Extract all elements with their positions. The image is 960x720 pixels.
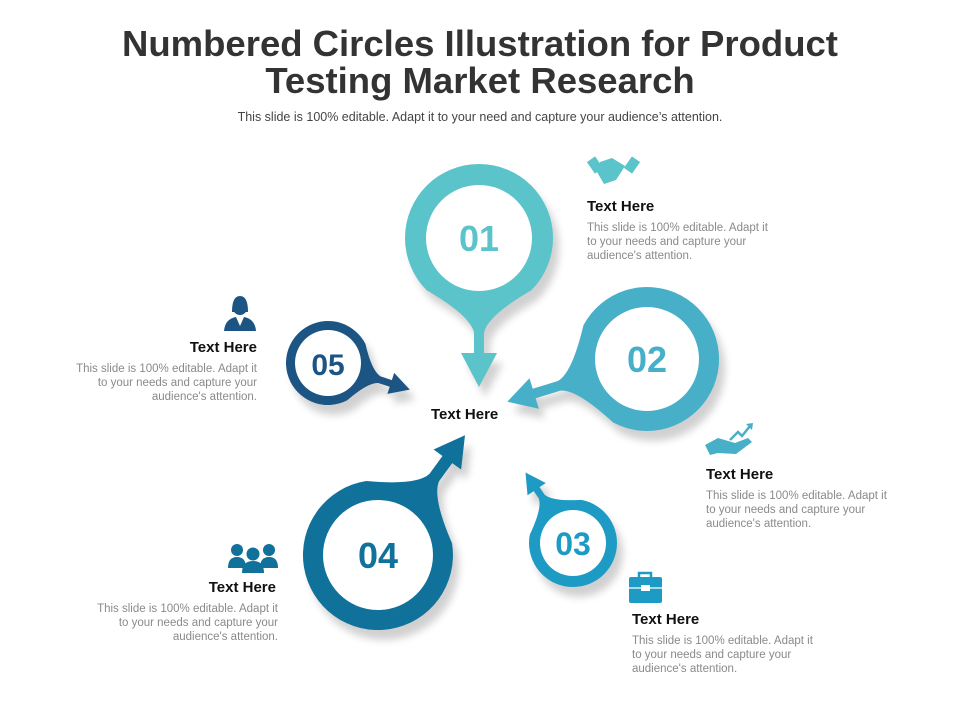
title [122,23,838,101]
text block 02: Text Here [706,466,773,483]
pin 03: 03 [555,526,591,562]
text block 05: This slide is 100% editable. Adapt it [76,363,257,375]
pin 04: 04 [358,535,398,576]
text block 04: Text Here [209,579,276,596]
text block 05: audience's attention. [152,391,257,403]
icon: handshake [587,156,640,184]
text block 03: to your needs and capture your [632,649,791,661]
text block 03: audience's attention. [632,663,737,675]
text block 03: Text Here [632,611,699,628]
text block 03: This slide is 100% editable. Adapt it [632,635,813,647]
pin 03 [489,448,640,614]
text block 01: This slide is 100% editable. Adapt it [587,222,768,234]
pin 02: 02 [627,339,667,380]
text block 02 [706,466,887,530]
text block 01 [587,198,768,262]
center label: Text Here [431,406,498,423]
icon: team [228,544,278,573]
text block 02: audience's attention. [706,518,811,530]
text block 04: audience's attention. [173,631,278,643]
text block 05 [76,339,257,403]
text block 05: Text Here [190,339,257,356]
icon: hand with growth arrow [705,423,753,455]
pin 05 [275,310,429,440]
icon: woman [224,296,256,331]
pin 01 [405,164,559,397]
text block 04: to your needs and capture your [119,617,278,629]
text block 04: This slide is 100% editable. Adapt it [97,603,278,615]
text block 03 [632,611,813,675]
text block 02: This slide is 100% editable. Adapt it [706,490,887,502]
text block 05: to your needs and capture your [98,377,257,389]
icon: briefcase [629,573,662,603]
pin 05: 05 [311,349,345,382]
text block 01: audience's attention. [587,250,692,262]
text block 01: to your needs and capture your [587,236,746,248]
subtitle: This slide is 100% editable. Adapt it to your need and capture your audience’s attention. [238,110,722,124]
pin 02 [486,269,743,481]
pin 04 [273,391,532,670]
text block 02: to your needs and capture your [706,504,865,516]
title: Testing Market Research [265,60,695,101]
text block 01: Text Here [587,198,654,215]
title: Numbered Circles Illustration for Product [122,23,838,64]
text block 04 [97,579,278,643]
pin 01: 01 [459,218,499,259]
